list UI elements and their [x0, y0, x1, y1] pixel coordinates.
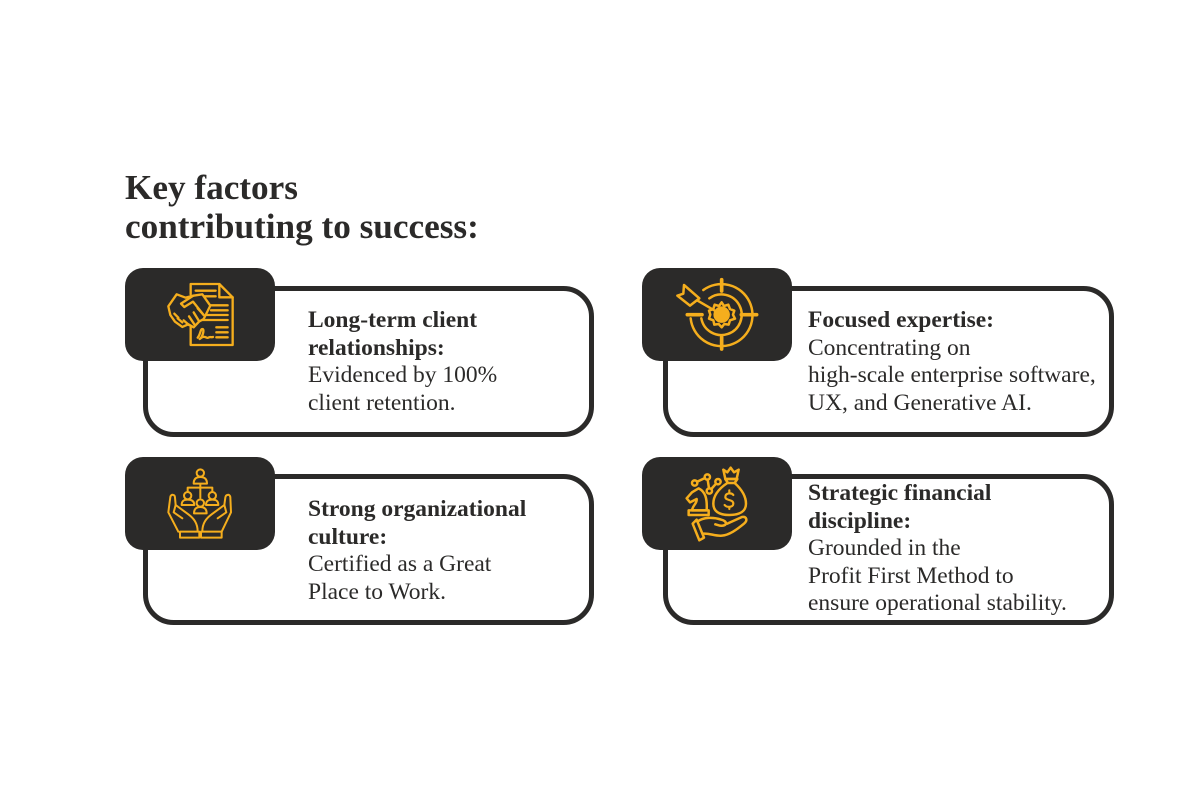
title: contributing to success: — [125, 207, 479, 246]
icon panel: focused expertise — [642, 268, 792, 361]
text: client relationships: relationships: — [308, 334, 445, 360]
card outline: organizational culture — [146, 476, 592, 622]
icon panel: financial discipline — [642, 457, 792, 550]
text: client relationships: Long-term client — [308, 307, 477, 333]
icon: money bag, chess knight and hand — [687, 468, 746, 540]
text: focused expertise — [808, 307, 1096, 416]
text: financial discipline: Grounded in the — [808, 535, 961, 561]
text: organizational culture: Certified as a Great — [308, 551, 491, 577]
text: financial discipline: Profit First Method to — [808, 562, 1014, 588]
text: financial discipline: discipline: — [808, 508, 911, 534]
text: client relationships: Evidenced by 100% — [308, 362, 497, 388]
text: client relationships — [308, 307, 497, 416]
text: organizational culture — [308, 496, 526, 604]
card outline: client relationships — [146, 288, 592, 434]
text: financial discipline — [808, 480, 1067, 616]
text: focused expertise: Concentrating on — [808, 334, 971, 360]
text: focused expertise: Focused expertise: — [808, 307, 994, 333]
text: focused expertise: high-scale enterprise software, — [808, 362, 1096, 388]
title: Key factors — [125, 168, 298, 207]
text: organizational culture: culture: — [308, 524, 387, 550]
text: focused expertise: UX, and Generative AI. — [808, 390, 1032, 416]
icon: handshake and contract — [168, 284, 233, 345]
text: financial discipline: Strategic financial — [808, 480, 991, 506]
text: financial discipline: ensure operational stability. — [808, 590, 1067, 616]
icon: target with arrow and gear — [677, 280, 757, 349]
icon panel: client relationships — [125, 268, 275, 361]
text: organizational culture: Strong organizational — [308, 496, 526, 522]
icon: hands holding team hierarchy — [168, 469, 231, 538]
card outline: financial discipline — [666, 476, 1112, 622]
text: client relationships: client retention. — [308, 390, 455, 416]
title — [125, 168, 479, 246]
card outline: focused expertise — [666, 288, 1112, 434]
text: organizational culture: Place to Work. — [308, 578, 446, 604]
icon panel: organizational culture — [125, 457, 275, 550]
